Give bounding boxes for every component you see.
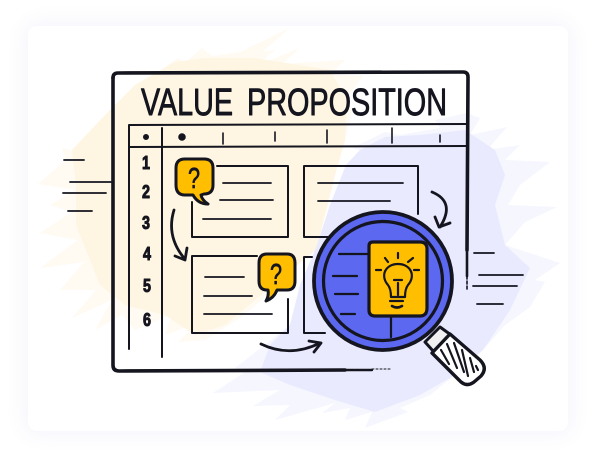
- row numbers: 6: [143, 310, 151, 330]
- spreadsheet grid: [129, 124, 467, 357]
- row numbers: 2: [142, 182, 150, 202]
- row numbers: 4: [143, 244, 151, 264]
- magnifier: [314, 212, 484, 385]
- speech bubble: question 2: [259, 254, 295, 301]
- magnifier lens: [314, 212, 452, 350]
- speech bubble: question 1: ?: [188, 163, 200, 195]
- brush: lavender: [213, 113, 560, 428]
- card: bottom middle: [304, 257, 325, 333]
- speech bubble: question 2: ?: [270, 259, 282, 291]
- title: [141, 82, 447, 124]
- speech bubble: question 1: [176, 159, 213, 204]
- motion lines: left: [63, 160, 112, 211]
- card: top right: [304, 166, 418, 237]
- row numbers: 1: [142, 153, 150, 173]
- card: top left: [192, 166, 288, 237]
- row numbers: 5: [143, 276, 151, 296]
- title: VALUE: [141, 82, 233, 124]
- arrow: bottom: [261, 341, 321, 352]
- brush: cream: [38, 28, 363, 342]
- card: bottom left: [192, 256, 288, 333]
- card background: [28, 26, 568, 431]
- board frame: [113, 72, 468, 371]
- motion lines: right: [473, 253, 523, 304]
- idea card: [369, 242, 427, 316]
- title: PROPOSITION: [247, 82, 447, 124]
- arrow: down left: [172, 210, 187, 260]
- icon: light bulb: [376, 253, 419, 308]
- row numbers: 3: [142, 213, 150, 233]
- arrow: right: [432, 192, 450, 227]
- magnifier handle: [425, 327, 484, 385]
- lens lines: [333, 254, 391, 337]
- row numbers: [142, 153, 151, 330]
